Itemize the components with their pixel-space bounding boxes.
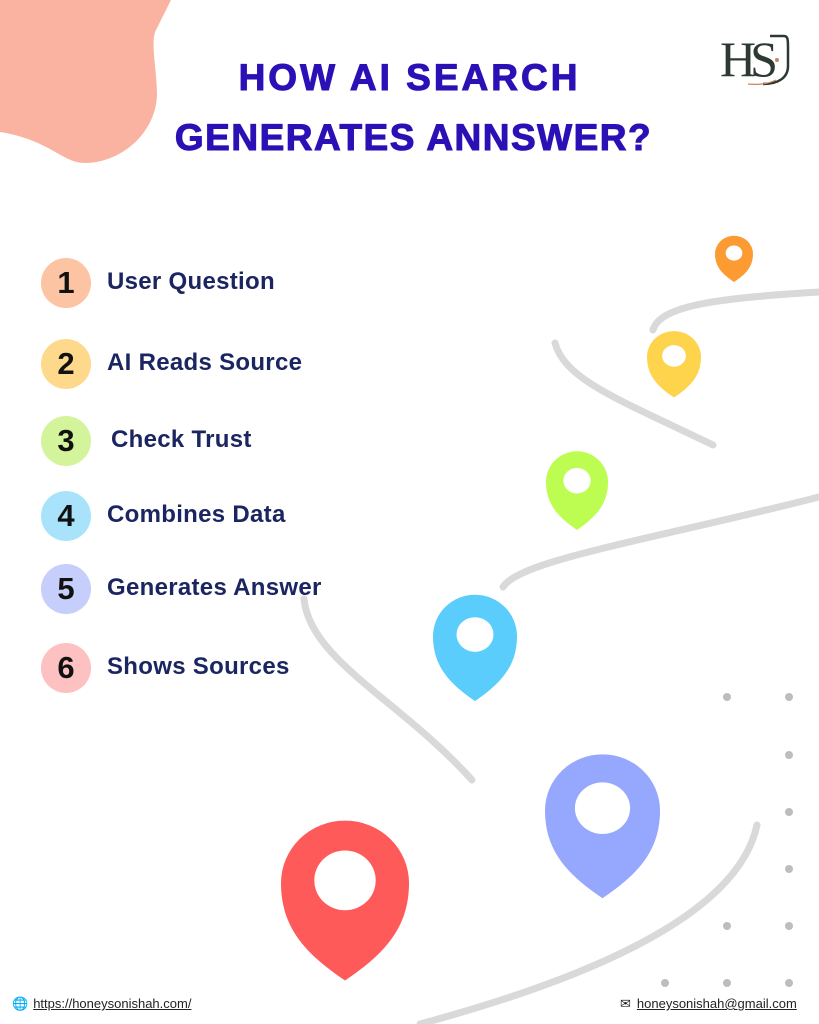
step 5: Generates Answer [107, 574, 322, 601]
step 3: 3 [57, 423, 75, 458]
step 5: 5 [57, 571, 75, 606]
step 1 [41, 258, 275, 308]
step 2 [41, 339, 302, 389]
step 4: 4 [57, 498, 75, 533]
footer: email: ✉ [620, 996, 631, 1011]
dots [661, 693, 793, 987]
logo: HS [720, 31, 772, 87]
title: HOW AI SEARCH [239, 57, 580, 98]
step 6: 6 [57, 650, 75, 685]
step 4: Combines Data [107, 501, 286, 528]
footer: website: https://honeysonishah.com/ [33, 996, 191, 1011]
pin: red [281, 821, 409, 980]
step 1: 1 [57, 265, 75, 300]
step 6 [41, 643, 290, 693]
pin: yellow [647, 331, 701, 398]
decorative blob [0, 0, 171, 163]
step 3 [41, 416, 252, 466]
pin: blue [433, 595, 517, 701]
pin: orange [715, 236, 753, 282]
step 2: AI Reads Source [107, 349, 302, 376]
footer: email: honeysonishah@gmail.com [637, 996, 797, 1011]
step 3: Check Trust [111, 426, 252, 453]
step 2: 2 [57, 346, 75, 381]
step 1: User Question [107, 268, 275, 295]
footer: website: 🌐 [12, 996, 28, 1011]
pin: purple [545, 754, 660, 898]
title [175, 57, 652, 158]
step 5 [41, 564, 322, 614]
title: GENERATES ANNSWER? [175, 117, 652, 158]
step 6: Shows Sources [107, 653, 290, 680]
pin: green [546, 451, 608, 530]
step 4 [41, 491, 286, 541]
